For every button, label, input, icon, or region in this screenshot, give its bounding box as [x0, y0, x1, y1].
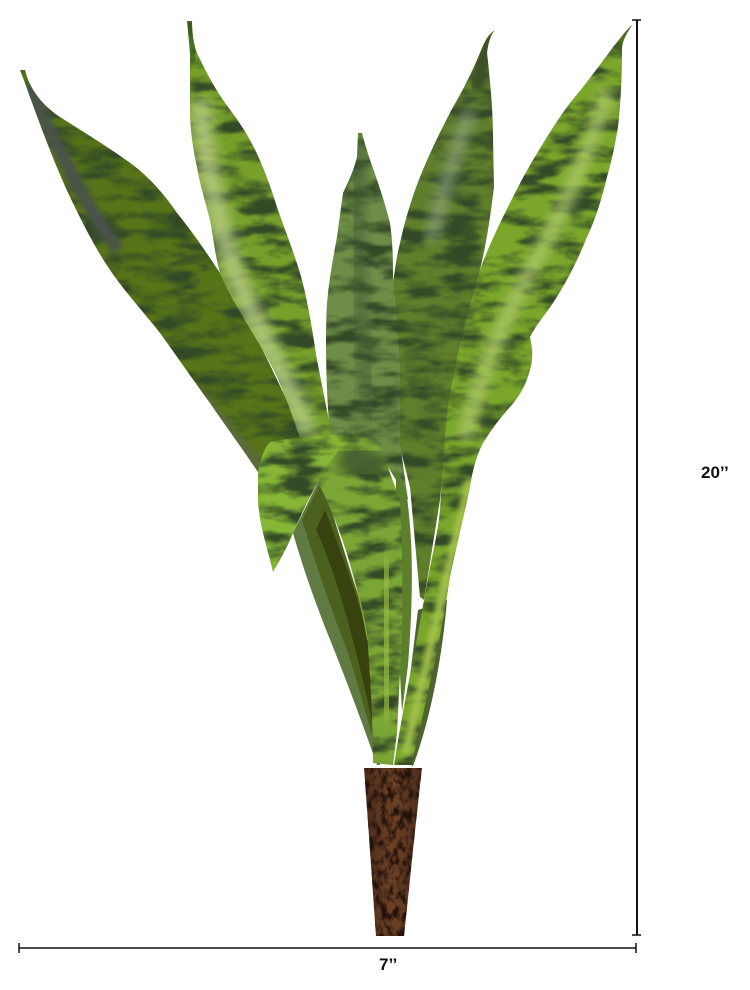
leaf: folded main blade [318, 436, 402, 765]
leaf: dark sheath under fold [293, 470, 380, 765]
leaf: dark rear stalk [400, 600, 447, 766]
trunk [364, 768, 422, 936]
height dimension line [632, 20, 641, 935]
width label: 7’’ [379, 955, 397, 974]
leaf: second from left [185, 18, 335, 443]
leaf: back right [393, 30, 495, 600]
leaf: far left [15, 65, 310, 475]
height label: 20’’ [701, 463, 729, 482]
leaf: far right [390, 20, 635, 770]
leaf: folded front flap [258, 435, 359, 572]
leaf: centre [326, 133, 408, 500]
leaf: side strip [396, 468, 412, 712]
width dimension line [19, 943, 636, 953]
